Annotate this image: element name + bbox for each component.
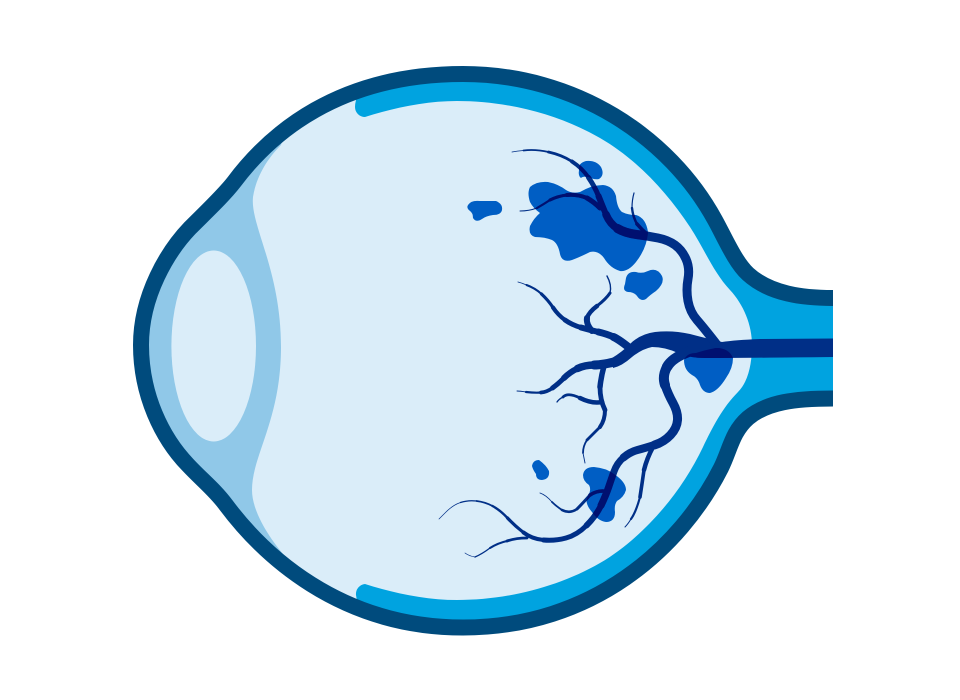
vessel: short central twig (557, 395, 602, 402)
vessel: optic nerve trunk (612, 331, 833, 368)
lower hemorrhage (583, 467, 626, 522)
optic disc hemorrhage (684, 348, 733, 393)
vessel: descending central branch (583, 366, 605, 463)
mid-right hemorrhage (624, 270, 663, 300)
vessel overlap with hemorrhages (534, 164, 733, 518)
leakage blobs (467, 161, 733, 522)
vessel: upper side branch left (520, 195, 600, 211)
eye cross-section diagram (133, 66, 833, 636)
vessel: lower main branch (439, 352, 688, 540)
left hemorrhage (467, 201, 502, 221)
small lower hemorrhage (532, 460, 549, 480)
retina and optic nerve sheath (355, 74, 833, 628)
small top hemorrhage (579, 161, 603, 179)
vessel: upper main branch (512, 150, 718, 346)
vessel: lower looping twig (540, 491, 603, 512)
eyeball interior (vitreous) (141, 74, 833, 628)
vessel: upper-left branch (518, 282, 632, 350)
lens (171, 250, 256, 442)
large hemorrhage (528, 182, 648, 271)
vessel: upper side branch right (632, 193, 648, 235)
eye outer wall (141, 74, 833, 628)
vessel: upper-left twig (587, 276, 611, 331)
vessel: central branch (517, 361, 618, 393)
vessel: lower right twig (625, 447, 653, 527)
blood vessels (439, 150, 833, 557)
vessel: lower far-left twig (465, 538, 527, 557)
anterior chamber (141, 130, 300, 582)
